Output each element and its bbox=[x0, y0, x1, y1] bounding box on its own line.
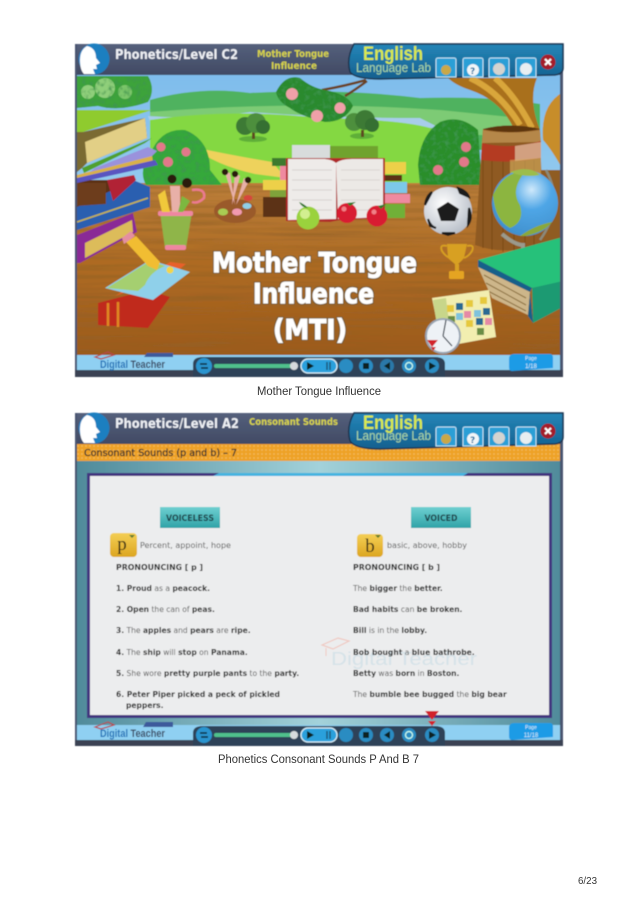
p examples: Percent, appoint, hope bbox=[140, 541, 231, 550]
English Language Lab panel: Language Lab bbox=[356, 428, 431, 443]
page number: 6/23 bbox=[578, 876, 598, 887]
palette and brushes bbox=[214, 169, 256, 223]
bush: middle bbox=[143, 130, 222, 185]
pencil cup bbox=[158, 174, 204, 250]
English Language Lab panel bbox=[349, 413, 563, 449]
English Language Lab panel: English bbox=[363, 413, 423, 434]
scene background bbox=[75, 75, 563, 370]
page indicator bbox=[509, 354, 553, 371]
slide title: Mother Tongue Influence (MTI): Influence bbox=[253, 277, 374, 310]
colour block stacks bbox=[263, 146, 410, 218]
logo: head icon bbox=[78, 412, 110, 444]
English Language Lab panel bbox=[349, 44, 563, 79]
flowers on right bush bbox=[433, 142, 471, 175]
Digital Teacher logo: Digital Teacher bbox=[100, 359, 166, 371]
p heading: PRONOUNCING [ p ] bbox=[116, 562, 203, 572]
page indicator: 1/18 bbox=[525, 364, 537, 370]
green book bbox=[478, 237, 563, 323]
page indicator: Page bbox=[525, 725, 537, 731]
topic title: Influence bbox=[271, 61, 317, 72]
soccer ball bbox=[424, 187, 472, 235]
b sentences: Bob bought a blue bathrobe. bbox=[353, 648, 475, 657]
clock bbox=[426, 319, 460, 353]
p tile: p bbox=[117, 534, 127, 555]
topic title bbox=[257, 49, 329, 72]
slide: Mother Tongue Influence bbox=[75, 44, 563, 377]
b sentences: Bad habits can be broken. bbox=[353, 605, 463, 614]
globe bbox=[492, 169, 558, 268]
English Language Lab panel: Language Lab bbox=[356, 60, 431, 75]
slide title: Mother Tongue Influence (MTI): Mother Tongue bbox=[212, 246, 417, 279]
slide title: Mother Tongue Influence (MTI): (MTI) bbox=[273, 313, 347, 346]
b sentences: Bill is in the lobby. bbox=[353, 626, 427, 635]
page indicator: 11/18 bbox=[524, 733, 539, 739]
caption: Phonetics Consonant Sounds P And B 7: Phonetics Consonant Sounds P And B 7 bbox=[218, 752, 419, 766]
bottom control bar bbox=[75, 352, 563, 377]
page indicator bbox=[509, 723, 553, 740]
Digital Teacher logo bbox=[95, 722, 166, 740]
Digital Teacher logo: Digital Teacher bbox=[100, 728, 166, 740]
orange title bar: Consonant Sounds (p and b) – 7 bbox=[84, 448, 237, 459]
p sentences: 5. She wore pretty purple pants to the party. bbox=[116, 669, 299, 678]
p sentences: 3. The apples and pears are ripe. bbox=[116, 626, 251, 635]
header bar bbox=[75, 44, 563, 377]
pencil and map bbox=[98, 231, 190, 328]
p tile bbox=[110, 533, 137, 557]
English Language Lab panel: ? bbox=[470, 436, 475, 446]
foliage: top left tree bbox=[77, 76, 152, 108]
p sentences: 1. Proud as a peacock. bbox=[116, 584, 210, 593]
page indicator: Page bbox=[525, 356, 537, 362]
b heading: PRONOUNCING [ b ] bbox=[353, 562, 440, 572]
red arrow marker bbox=[425, 711, 439, 726]
slide: Consonant Sounds p and b bbox=[75, 412, 563, 746]
English Language Lab panel: ? bbox=[470, 67, 475, 77]
b sentences: The bigger the better. bbox=[352, 584, 443, 593]
open book bbox=[286, 145, 385, 222]
column: voiced bbox=[352, 507, 507, 699]
b tile bbox=[357, 534, 383, 557]
p sentences bbox=[116, 584, 299, 710]
b sentences: Betty was born in Boston. bbox=[353, 669, 460, 678]
VOICELESS button: VOICELESS bbox=[166, 514, 214, 524]
VOICELESS button bbox=[160, 507, 220, 528]
calendar bbox=[432, 290, 496, 347]
VOICED button: VOICED bbox=[424, 514, 458, 524]
p sentences: 4. The ship will stop on Panama. bbox=[116, 648, 248, 657]
p sentences: 2. Open the can of peas. bbox=[116, 605, 215, 614]
topic title: Consonant Sounds bbox=[249, 417, 338, 428]
caption: Mother Tongue Influence: Mother Tongue Influence bbox=[257, 384, 381, 398]
book stack left bbox=[77, 110, 158, 266]
flowers on middle bush bbox=[156, 142, 190, 167]
b tile: b bbox=[365, 536, 375, 557]
slide title: Mother Tongue Influence (MTI) bbox=[212, 246, 417, 346]
watermark bbox=[322, 638, 477, 669]
b sentences bbox=[352, 584, 507, 699]
header bar bbox=[75, 412, 563, 746]
tree trunk bbox=[448, 78, 563, 270]
watermark: Digital Teacher bbox=[331, 649, 477, 669]
branch with blossoms bbox=[276, 77, 367, 122]
bottom control bar bbox=[75, 722, 563, 746]
small trees bbox=[236, 110, 379, 142]
topic title: Mother Tongue bbox=[257, 49, 329, 60]
p sentences: peppers. bbox=[126, 701, 164, 710]
trophy bbox=[441, 244, 473, 279]
logo: head icon bbox=[78, 44, 110, 74]
bush: right bbox=[418, 119, 482, 185]
orange title bar bbox=[77, 444, 560, 461]
VOICED button bbox=[411, 507, 471, 528]
teal background bbox=[75, 461, 563, 726]
p sentences: 6. Peter Piper picked a peck of pickled bbox=[116, 690, 280, 699]
English Language Lab panel: English bbox=[363, 44, 423, 65]
content card bbox=[88, 473, 550, 716]
barrel bbox=[475, 126, 543, 252]
b sentences: The bumble bee bugged the big bear bbox=[352, 690, 507, 699]
b examples: basic, above, hobby bbox=[387, 541, 468, 550]
Digital Teacher logo bbox=[95, 352, 166, 371]
apples bbox=[296, 202, 388, 230]
level title: Phonetics/Level A2 bbox=[115, 417, 239, 432]
column: voiceless bbox=[110, 507, 299, 710]
level title: Phonetics/Level C2 bbox=[115, 48, 238, 63]
